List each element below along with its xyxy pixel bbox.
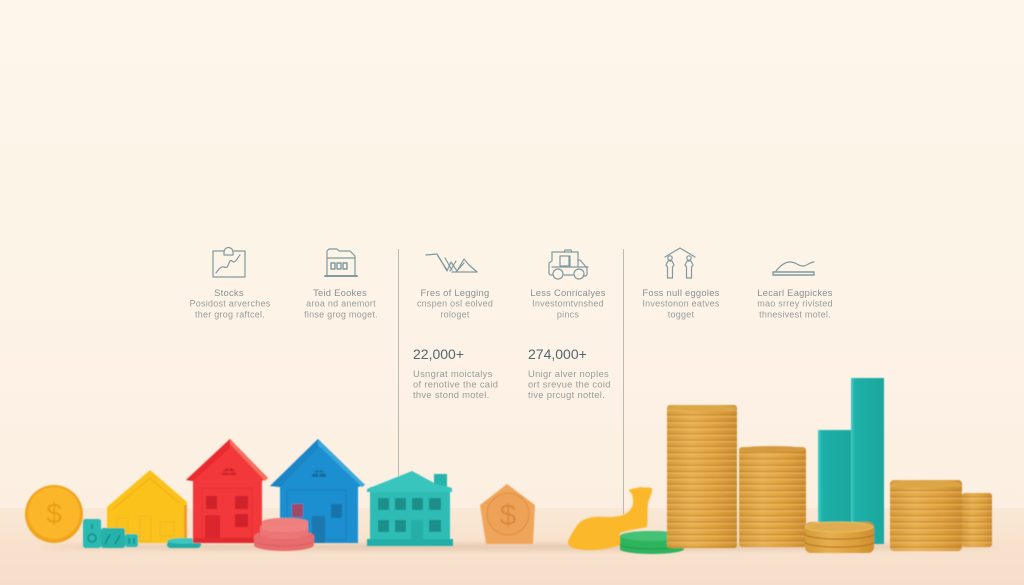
floor shadows (40, 544, 1000, 550)
description: cappickes: mao srrey rivisted (757, 298, 833, 308)
stat description: 274,000+: Unigr alver noples (528, 368, 609, 379)
stat description: 22,000+: Usngrat moictalys (413, 368, 493, 379)
teal letter blocks (83, 519, 138, 548)
red house (186, 439, 268, 543)
stat description: 22,000+: of renotive the caid (413, 378, 498, 390)
teal house (367, 471, 453, 546)
stat: 22,000+: 22,000+ (413, 346, 464, 362)
heading: investment: Less Conricalyes (530, 287, 606, 298)
yellow house (107, 470, 187, 543)
icon: delivery van (549, 250, 588, 279)
icon: people under roof (665, 248, 695, 278)
table surface (0, 508, 1024, 585)
icon: mountain line chart (426, 254, 477, 272)
description: stocks: ther grog raftcel. (195, 310, 265, 320)
stat description: 274,000+: ort srevue the coid (528, 378, 611, 390)
coin stack small back (962, 493, 992, 547)
column: cappickes (757, 262, 833, 320)
coin stack wide (890, 480, 962, 551)
description: stocks: Posidost arverches (189, 298, 271, 308)
coin stack flat (805, 522, 874, 553)
icon: gold dollar coin: $ (46, 498, 62, 529)
coral stacked discs (254, 518, 314, 551)
description: text books: finse grog moget. (304, 310, 378, 320)
coin stack tall (667, 405, 737, 548)
description: investment: pincs (557, 310, 579, 320)
description: text books: aroa nd anemort (306, 298, 376, 308)
divider line right (622, 249, 624, 514)
objects on the table (25, 378, 992, 554)
icon: gold dollar coin (25, 485, 83, 543)
column: stocks (189, 248, 271, 320)
teal bar short (818, 430, 853, 525)
heading: stocks: Stocks (214, 287, 244, 298)
description: eggs: Investonon eatves (642, 298, 720, 308)
teal coin (167, 538, 201, 548)
column: logging (413, 254, 498, 400)
heading: eggs: Foss null eggoles (642, 287, 720, 298)
stat: 274,000+: 274,000+ (528, 346, 587, 362)
coin stack medium (739, 446, 806, 547)
description: logging: rologet (440, 310, 470, 320)
heading: logging: Fres of Legging (421, 287, 489, 298)
icon: stock chart (213, 248, 245, 277)
heading: cappickes: Lecarl Eagpickes (757, 287, 833, 298)
stat description: 274,000+: tive prcugt nottel. (528, 389, 605, 400)
description: logging: cnspen osl eolved (417, 298, 493, 308)
green stacked discs (620, 531, 684, 554)
stat description: 22,000+: thve stond motel. (413, 389, 490, 400)
orange dollar badge (480, 484, 535, 544)
orange dollar badge: $ (500, 499, 517, 532)
column: investment (528, 250, 611, 400)
yellow figure (568, 487, 652, 550)
blue house (270, 439, 365, 543)
description: cappickes: thnesivest motel. (759, 310, 831, 320)
column: eggs (642, 248, 720, 320)
teal bar tall (851, 378, 884, 544)
description: investment: Investomtvnshed (532, 298, 604, 308)
icon: document laptop (325, 249, 357, 276)
icon: wave on bar (773, 262, 814, 275)
heading: text books: Teid Eookes (313, 287, 367, 298)
column: text books (304, 249, 378, 320)
description: eggs: togget (668, 310, 695, 320)
divider line left (398, 249, 400, 476)
